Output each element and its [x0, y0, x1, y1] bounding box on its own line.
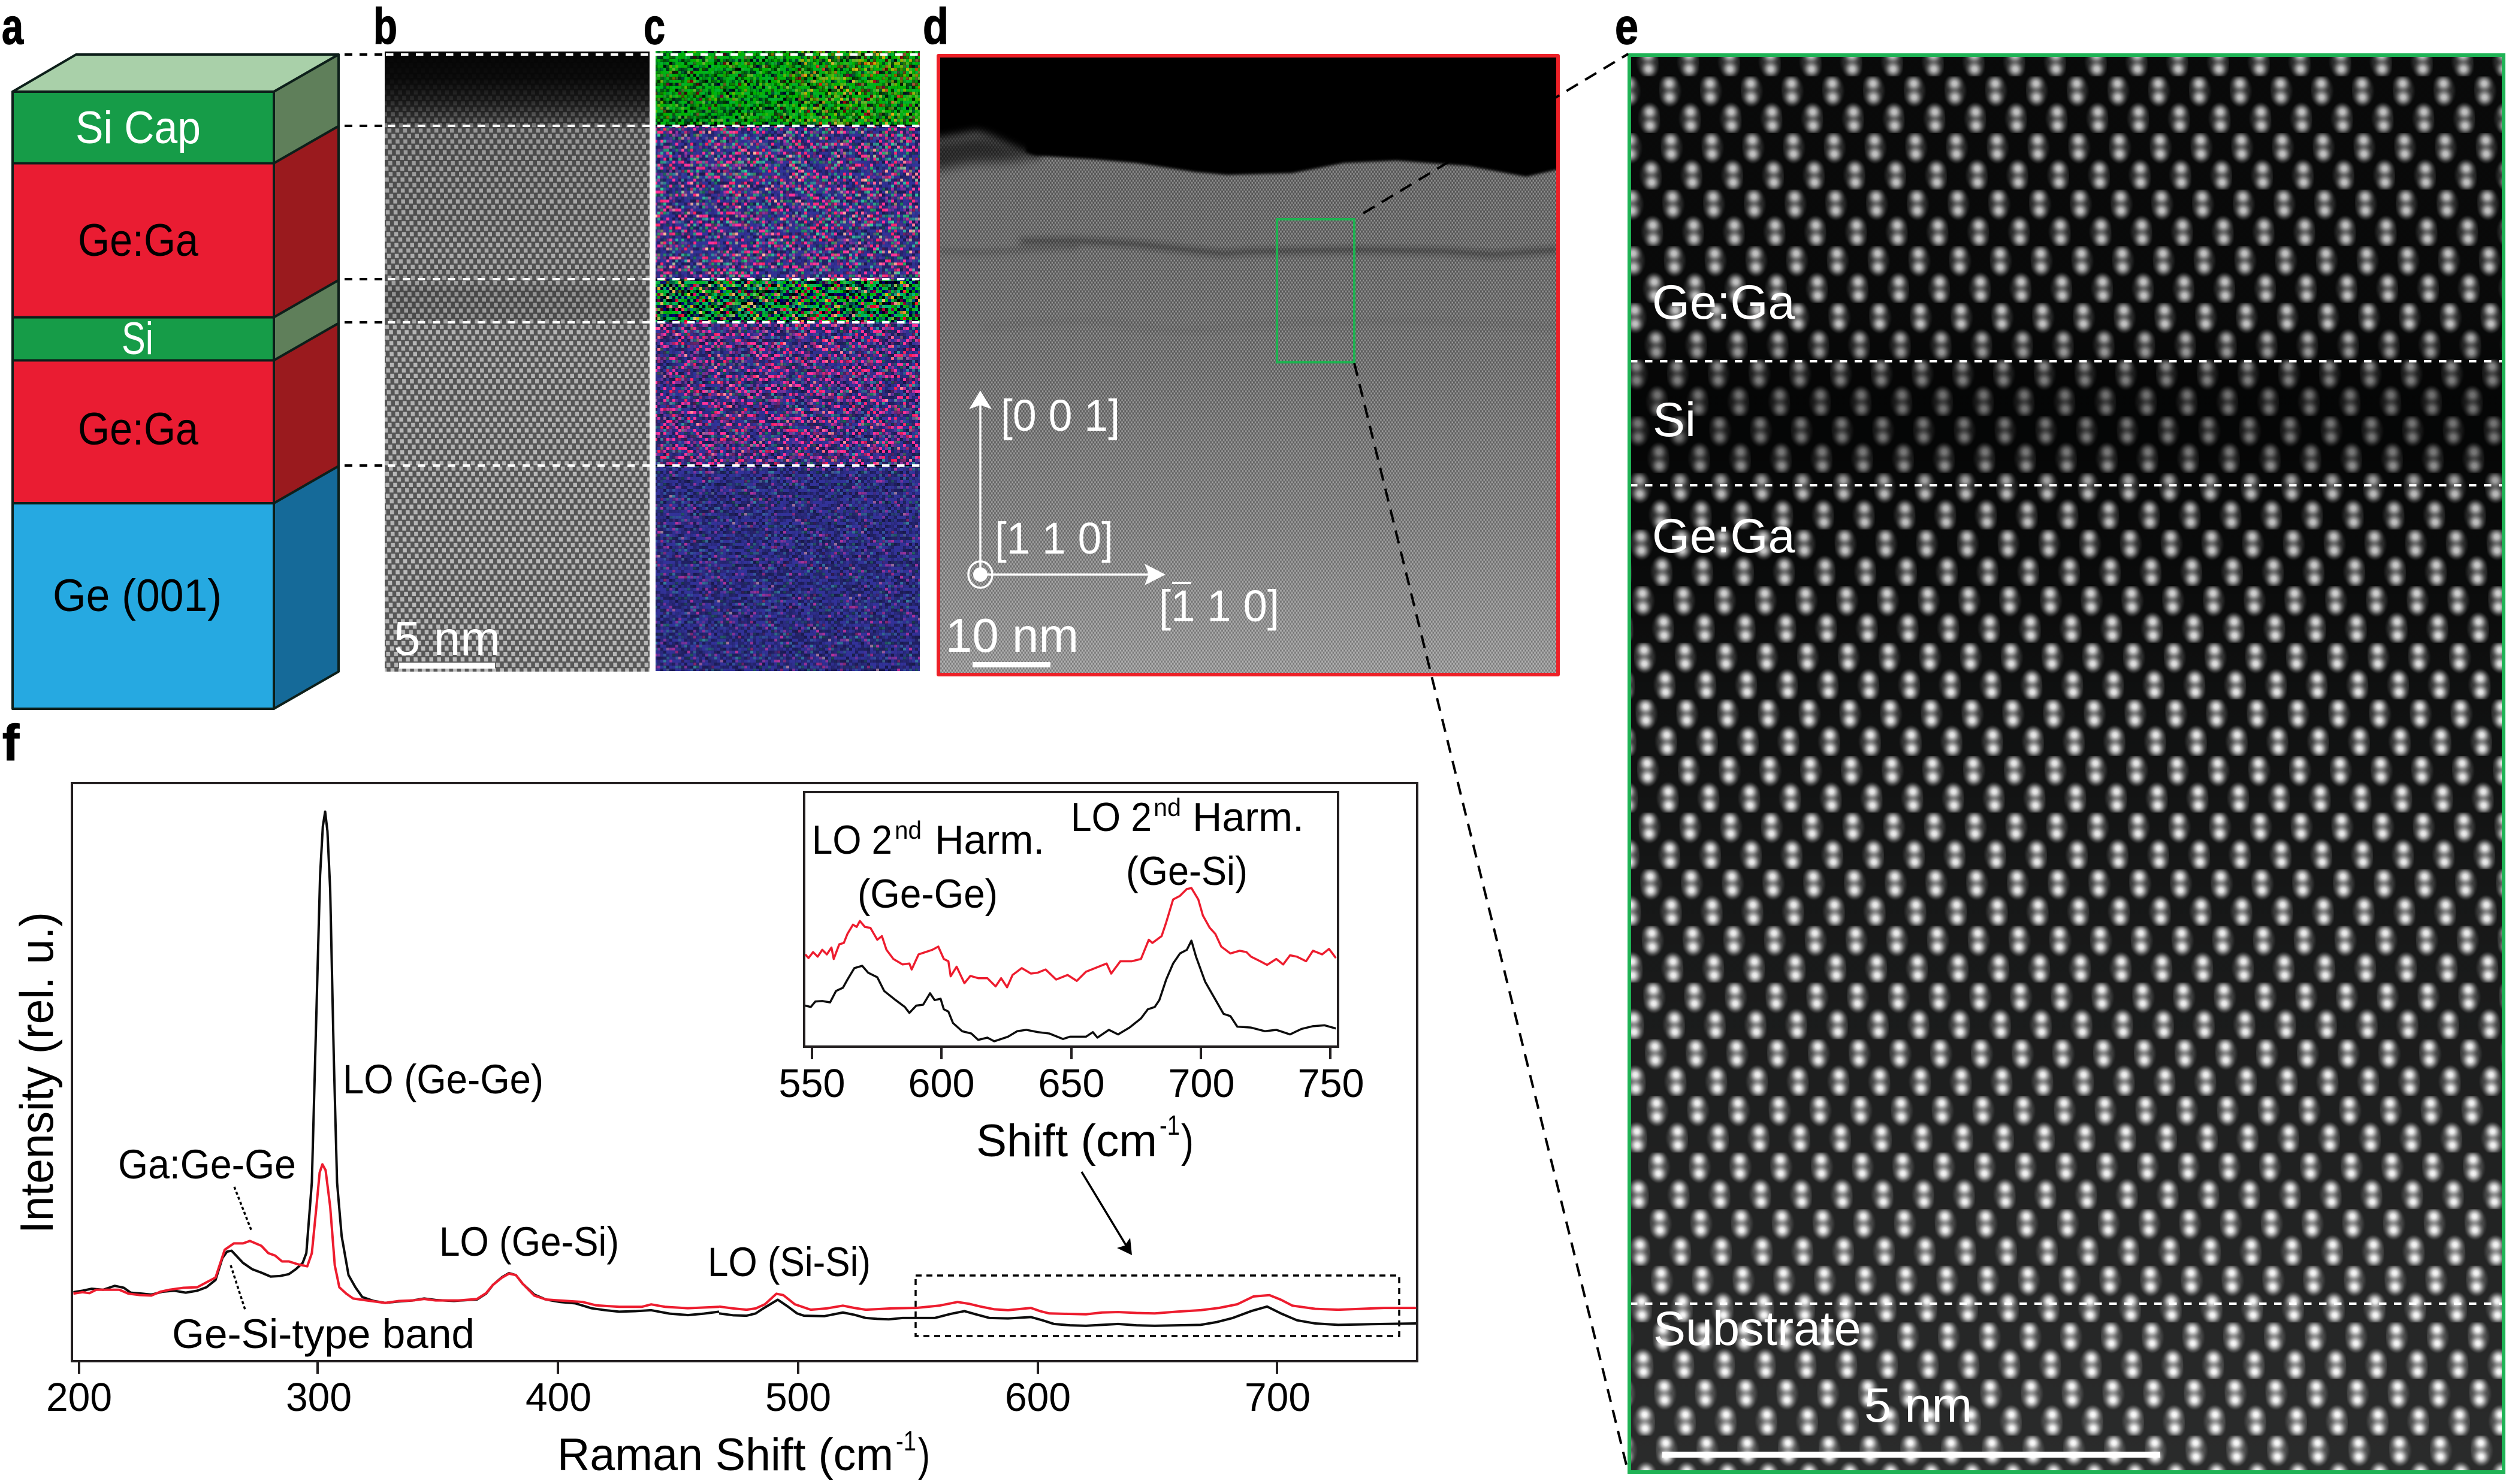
main axes frame	[72, 783, 1417, 1361]
label Ge (001): Ge (001)	[53, 570, 222, 621]
x tick labels: 400	[526, 1375, 591, 1420]
panel e: atomic-resolution STEM image	[1629, 55, 2504, 1472]
inset label: LO 2nd Harm. (Ge-Si)	[1071, 793, 1304, 894]
zoom connector lines d to e	[1354, 54, 1628, 1472]
interface guide lines across a, b, c	[345, 55, 920, 466]
inset tick labels: 650	[1038, 1061, 1105, 1106]
scale bar d	[973, 662, 1050, 667]
dim mound near surface	[923, 135, 1037, 173]
panel e green frame	[1629, 55, 2504, 1472]
label Ge:Ga lower e: Ge:Ga	[1652, 509, 1796, 563]
inset label: LO 2nd Harm. (Ge-Ge)	[812, 816, 1044, 917]
buried Si layer dark band: main	[1020, 241, 1558, 255]
inset chart: second harmonic detail	[779, 792, 1364, 1166]
panel d: low-magnification STEM image	[923, 42, 1570, 675]
arrow: [-1 1 0] axis	[980, 564, 1166, 585]
dotted leader Ge-Si-type band	[231, 1265, 246, 1311]
panel c: EDS colour map	[656, 51, 920, 671]
inset label: LO 2nd Harm. (Ge-Ge): (Ge-Ge)	[858, 871, 998, 917]
faint lower layer line	[983, 321, 1558, 330]
x tick labels: 600	[1005, 1375, 1071, 1420]
layer: Ge substrate	[13, 503, 274, 709]
inset label: LO 2nd Harm. (Ge-Si): Harm.	[1192, 794, 1304, 840]
inset tick labels: 550	[779, 1061, 845, 1106]
label Si Cap: Si Cap	[76, 102, 201, 153]
label Ge:Ga upper: Ge:Ga	[78, 215, 199, 266]
inset tick labels: 750	[1298, 1061, 1364, 1106]
out-of-plane axis symbol	[968, 561, 992, 588]
overbar	[1172, 582, 1191, 584]
inset x axis title: )	[1181, 1116, 1194, 1166]
inset tick labels: 700	[1169, 1061, 1234, 1106]
peak label Ge-Si-type band: Ge-Si-type band	[172, 1311, 475, 1357]
peak label LO (Si-Si): LO (Si-Si)	[708, 1239, 871, 1285]
x tick labels: 200	[46, 1375, 112, 1420]
y axis title: Intensity (rel. u.)	[10, 912, 63, 1234]
inset tick labels	[779, 1061, 1364, 1106]
dotted box around second harmonic region	[916, 1276, 1399, 1336]
inset label: LO 2nd Harm. (Ge-Ge): LO 2	[812, 817, 892, 863]
arrow: [0 0 1] axis	[969, 391, 992, 575]
inset label: LO 2nd Harm. (Ge-Si): nd	[1154, 793, 1181, 821]
black spectrum	[73, 812, 1416, 1326]
x axis title: -1	[896, 1425, 916, 1456]
panel label f: f	[2, 715, 20, 771]
layer: Si	[13, 318, 274, 361]
dotted leader Ga:Ge-Ge	[234, 1187, 252, 1231]
x axis title: )	[918, 1429, 930, 1480]
inset label: LO 2nd Harm. (Ge-Si): LO 2	[1071, 794, 1152, 840]
peak label LO (Ge-Ge): LO (Ge-Ge)	[343, 1056, 544, 1102]
zoom region box	[1277, 219, 1354, 362]
inset frame	[804, 792, 1338, 1047]
panel a: layer stack block	[13, 55, 339, 709]
inset red trace	[805, 888, 1336, 987]
x tick labels: 700	[1245, 1375, 1311, 1420]
inset x axis title: Shift (cm	[976, 1116, 1157, 1166]
label Si: Si	[122, 313, 153, 364]
inset label: LO 2nd Harm. (Ge-Ge): nd	[895, 816, 922, 844]
label [1 1 0]: [1 1 0]	[995, 513, 1113, 563]
inset ticks	[812, 1047, 1330, 1059]
scale bar b	[399, 663, 495, 669]
scale label e: 5 nm	[1864, 1379, 1972, 1432]
red spectrum	[73, 1164, 1416, 1314]
inset x axis title: -1	[1160, 1110, 1180, 1141]
x tick labels	[46, 1375, 1311, 1420]
label [0 0 1]: [0 0 1]	[1001, 391, 1120, 440]
inset label: LO 2nd Harm. (Ge-Si): (Ge-Si)	[1126, 848, 1248, 894]
label Ge:Ga top: Ge:Ga	[1652, 276, 1796, 330]
panel f: Raman spectrum chart	[10, 783, 1417, 1480]
x ticks	[79, 1361, 1277, 1374]
label Ge:Ga lower: Ge:Ga	[78, 404, 199, 455]
x tick labels: 300	[286, 1375, 352, 1420]
buried Si layer dark band: left faint	[938, 247, 1079, 252]
arrow from inset to dotted box	[1082, 1172, 1132, 1255]
label [-1 1 0]: [1 1 0]	[1159, 581, 1279, 631]
interface dashes e	[1630, 361, 2502, 1304]
layer: Ge:Ga upper	[13, 163, 274, 318]
x axis title: Raman Shift (cm	[557, 1429, 893, 1480]
inset label: LO 2nd Harm. (Ge-Ge): Harm.	[935, 817, 1044, 863]
inset tick labels: 600	[908, 1061, 974, 1106]
x tick labels: 500	[765, 1375, 831, 1420]
peak label Ga:Ge-Ge: Ga:Ge-Ge	[118, 1141, 296, 1187]
scale bar e	[1662, 1452, 2160, 1458]
panel b: STEM image	[385, 52, 650, 672]
top face	[13, 55, 339, 92]
layer: Ge:Ga lower	[13, 361, 274, 503]
side faces	[274, 55, 339, 709]
label Si e: Si	[1653, 393, 1696, 447]
label Substrate: Substrate	[1653, 1302, 1861, 1356]
scale bar label b: 5 nm	[394, 612, 500, 665]
crystal axes	[968, 391, 1166, 588]
surface black region	[1025, 58, 1556, 179]
peak label LO (Ge-Si): LO (Ge-Si)	[439, 1219, 619, 1265]
scale label d: 10 nm	[946, 609, 1079, 662]
inset black trace	[805, 941, 1336, 1041]
panel d red frame	[938, 56, 1558, 675]
layer: Si cap	[13, 92, 274, 163]
surface black region left side	[940, 58, 1044, 162]
